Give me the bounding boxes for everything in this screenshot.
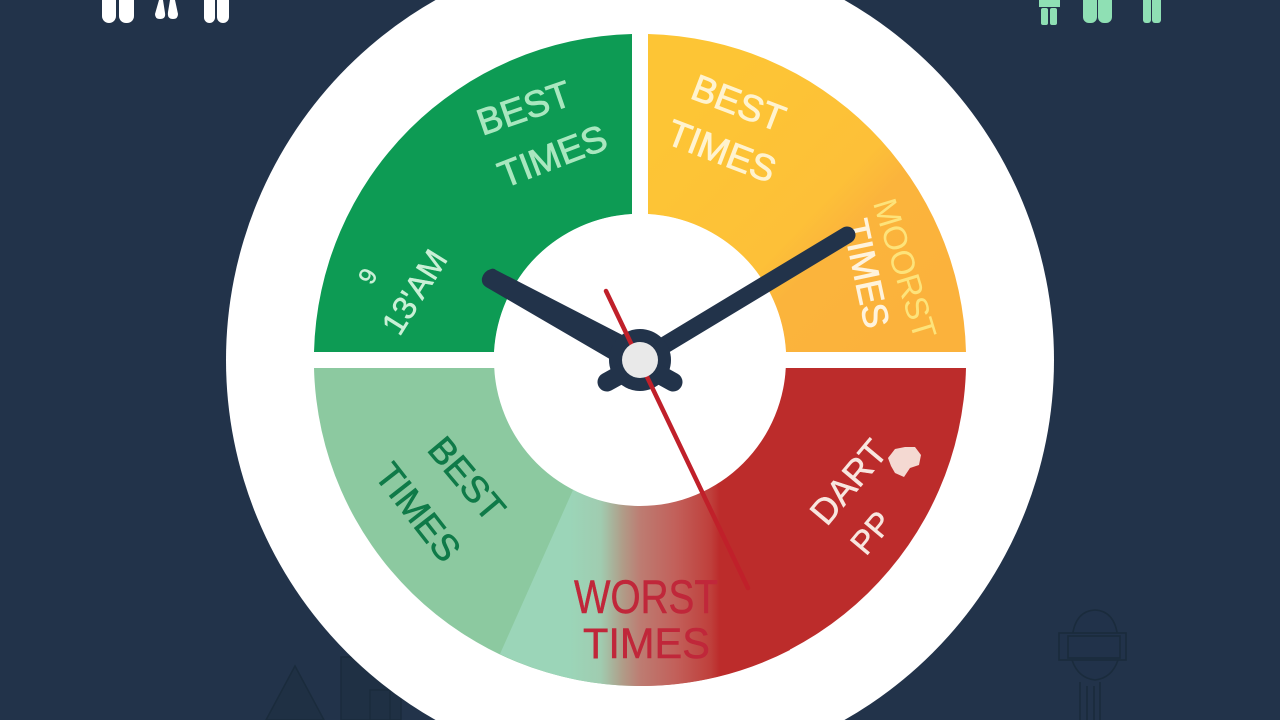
label: dart pp: DART [801,431,895,532]
label: worst times: WORST [574,570,718,623]
label: moorst times: TIMES [835,215,898,331]
label: moorst times: MOORST [866,194,944,343]
clock face [226,0,1054,720]
label: best times dark green: BEST [420,429,513,529]
label: dart pp: PP [843,504,900,561]
panel: bottom gradient wedge [500,480,790,686]
second hand [606,291,748,588]
label: 9 13 AM: 13'AM [374,243,454,341]
icon group: green figures top right [1039,0,1161,25]
label: best times green: BEST [472,73,576,143]
panel: top-right yellow quadrant [648,34,966,352]
skyline: faint tower bottom right [1059,610,1126,720]
icon group: white figures top left [102,0,229,23]
label: best times yellow [661,67,791,191]
label: best times green: TIMES [492,117,613,196]
skyline: faint buildings bottom left [266,657,401,720]
panel: bottom-right red quadrant [640,368,966,686]
hour hand right [640,235,847,360]
label: worst times [574,570,718,668]
clock inner dial [300,20,980,506]
label: best times dark green [367,429,513,569]
minute hand left [482,269,632,365]
panel: top-left green quadrant [314,34,632,352]
label: worst times: TIMES [583,620,710,668]
label: 9 13 AM: 9 [353,264,383,289]
hub [607,329,673,391]
panel: bottom-left light green quadrant [314,368,640,686]
hub cap [622,342,658,378]
label: best times green [472,73,613,196]
label: best times yellow: TIMES [661,112,782,191]
label: best times yellow: BEST [686,67,791,140]
clock hands [482,235,847,588]
label: best times dark green: TIMES [367,455,469,569]
icon: splat [888,447,921,477]
